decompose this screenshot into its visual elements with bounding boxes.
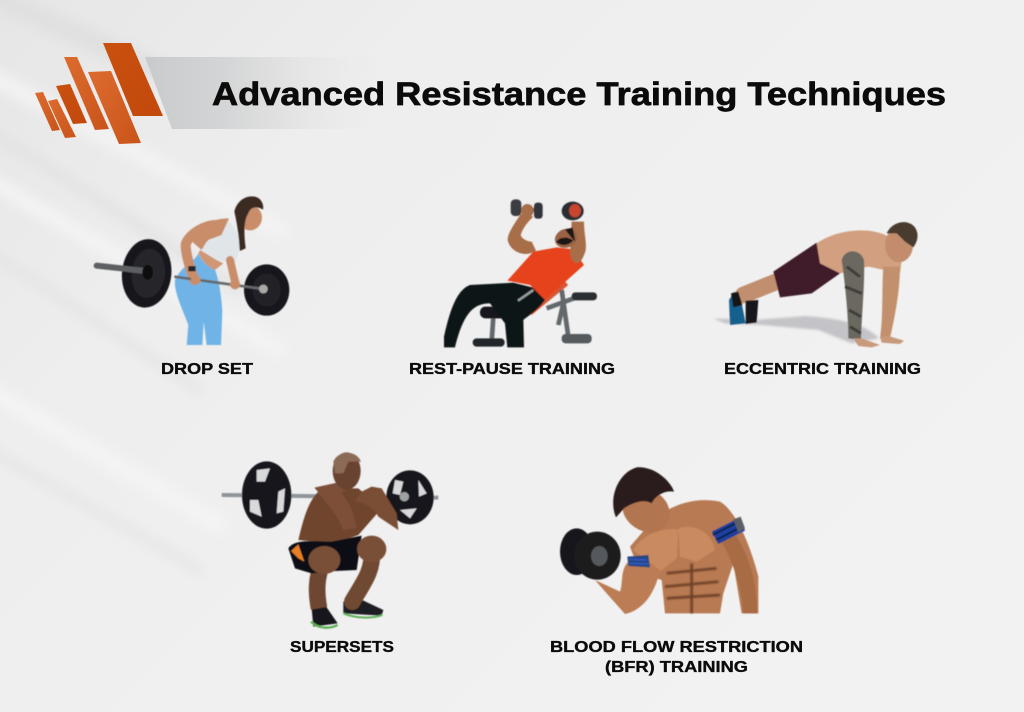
label: eccentric training: ECCENTRIC TRAINING — [724, 361, 921, 378]
label: blood flow restriction training: BLOOD FLOW RESTRICTION — [550, 639, 803, 656]
label: supersets: SUPERSETS — [290, 639, 394, 656]
logo — [35, 43, 163, 144]
title: Advanced Resistance Training Techniques — [212, 76, 946, 112]
figure: eccentric push-up — [713, 222, 918, 347]
figure: rest-pause incline dumbbell press — [444, 199, 597, 347]
label: drop set: DROP SET — [161, 361, 254, 378]
figure: drop set barbell row — [97, 196, 289, 345]
title banner — [145, 57, 410, 129]
label: blood flow restriction training: (BFR) TRAINING — [605, 659, 748, 676]
label: rest-pause training: REST-PAUSE TRAINING — [409, 361, 615, 378]
figure: blood flow restriction curl — [560, 467, 758, 614]
figure: supersets front squat — [222, 452, 438, 628]
